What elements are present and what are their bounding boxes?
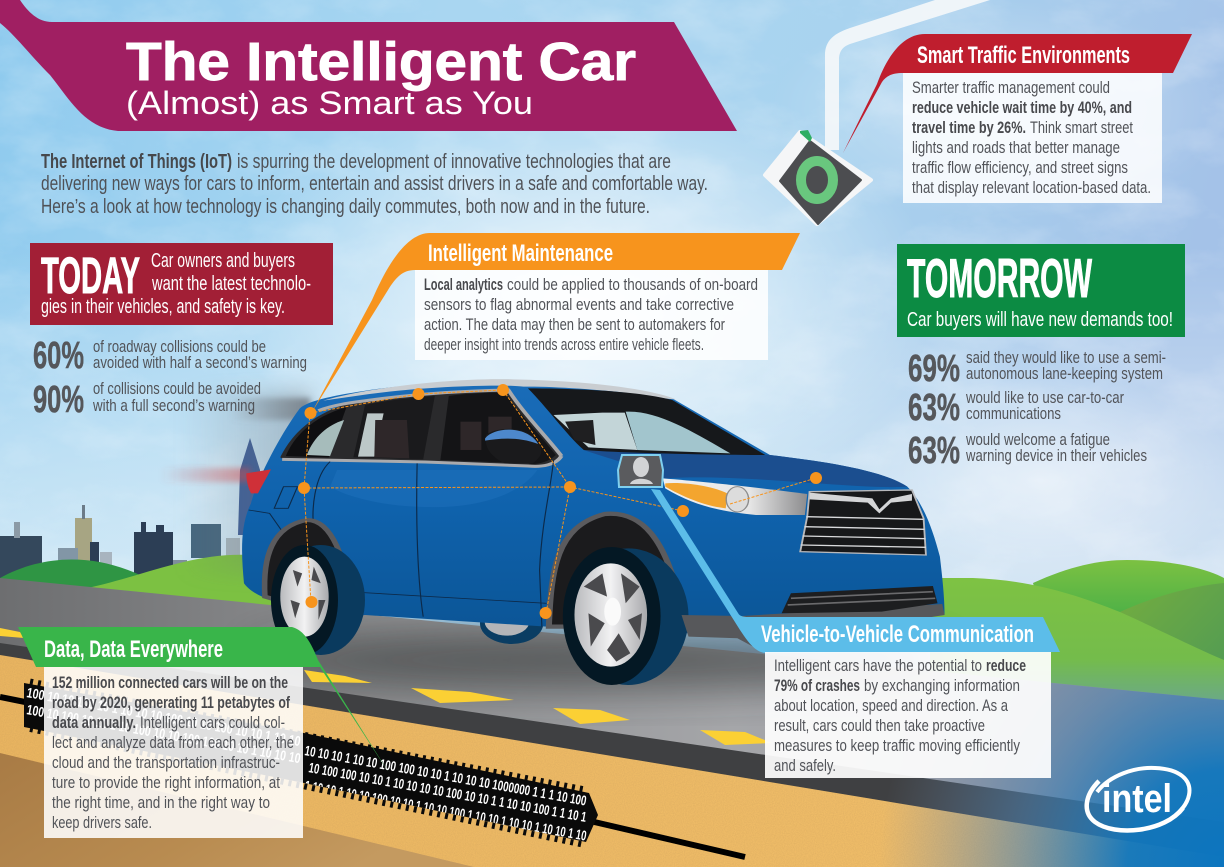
today description: want the latest technolo- bbox=[151, 273, 311, 295]
body text: keep drivers safe. bbox=[52, 813, 152, 832]
tail light bbox=[246, 469, 271, 493]
rear wheel bbox=[271, 545, 365, 655]
body text: action. The data may then be sent to automakers for bbox=[424, 315, 725, 334]
stat 63% car-to-car: would like to use car-to-car bbox=[965, 388, 1124, 407]
body text: and safely. bbox=[774, 756, 836, 775]
binary data cable: 1 10 10 1 10 10 100 10 10 1 10 10 100 1 10 10 1 10 10 1 10 10 1 10 bbox=[303, 777, 588, 844]
body text: road by 2020, generating 11 petabytes of bbox=[52, 693, 290, 712]
front wheel bbox=[563, 547, 689, 685]
far rear wheel bbox=[480, 603, 543, 644]
body text: ture to provide the right information, at bbox=[52, 773, 280, 792]
rear quarter window bbox=[286, 407, 346, 457]
heading: Intelligent Maintenance bbox=[428, 240, 613, 267]
body text: Smarter traffic management could bbox=[912, 78, 1110, 97]
headlight bbox=[663, 478, 807, 515]
red banner with pointer bbox=[843, 34, 1192, 153]
body highlight bbox=[330, 470, 537, 507]
body text: travel time by 26%. bbox=[912, 118, 1026, 137]
main title: The Intelligent Car bbox=[126, 32, 636, 92]
today statistics bbox=[33, 335, 307, 421]
body text: Local analytics bbox=[424, 275, 503, 294]
driver assist screen icon bbox=[618, 455, 663, 487]
light housing bbox=[765, 132, 871, 224]
body text: by exchanging information bbox=[864, 676, 1020, 695]
smart traffic environments panel bbox=[843, 34, 1192, 203]
green ring bbox=[801, 161, 833, 199]
intro text: delivering new ways for cars to inform, entertain and assist drivers in a safe and comfortable way. bbox=[41, 172, 708, 195]
intro text: is spurring the development of innovative technologies that are bbox=[237, 150, 671, 173]
body text bbox=[774, 656, 1026, 775]
intelligent maintenance panel bbox=[312, 233, 800, 412]
body text: Intelligent cars have the potential to bbox=[774, 656, 982, 675]
body text: deeper insight into trends across entire vehicle fleets. bbox=[424, 335, 704, 354]
body text bbox=[424, 275, 758, 354]
body text: lect and analyze data from each other, the bbox=[52, 733, 294, 752]
binary data cable: 100 10 10 100 10 1 10 10 10 100 10 10 100 10 10 1 10 10 bbox=[25, 684, 302, 749]
city skyline bbox=[0, 438, 260, 578]
green banner with pointer bbox=[18, 627, 389, 773]
body text: could be applied to thousands of on-board bbox=[507, 275, 758, 294]
road and ground bbox=[0, 578, 1224, 867]
stat 63% fatigue: 63% bbox=[908, 430, 960, 472]
binary data cable bbox=[0, 682, 745, 857]
side window frame bbox=[280, 390, 561, 466]
roof rail bbox=[323, 379, 676, 401]
tomorrow statistics bbox=[908, 348, 1166, 472]
front door window bbox=[440, 393, 556, 464]
intro text: Here’s a look at how technology is changing daily commutes, both now and in the future. bbox=[41, 195, 650, 218]
body card bbox=[415, 270, 768, 360]
stat 60%: of roadway collisions could be bbox=[93, 337, 266, 356]
blue banner with pointer bbox=[651, 489, 1060, 653]
front grille bbox=[800, 490, 926, 555]
intel logo: intel bbox=[1102, 777, 1172, 821]
right green hills bbox=[930, 560, 1224, 702]
stat 90%: of collisions could be avoided bbox=[93, 379, 261, 398]
today description: gies in their vehicles, and safety is key. bbox=[41, 296, 285, 318]
intro text: The Internet of Things (IoT) bbox=[41, 150, 232, 173]
data data everywhere panel bbox=[18, 627, 389, 838]
body text: Think smart street bbox=[1030, 118, 1133, 137]
body text: about location, speed and direction. As a bbox=[774, 696, 1008, 715]
orange banner with pointer bbox=[312, 233, 800, 412]
body text: lights and roads that better manage bbox=[912, 138, 1120, 157]
today panel bbox=[30, 243, 333, 325]
body text: cloud and the transportation infrastruc- bbox=[52, 753, 280, 772]
stat 63% fatigue bbox=[908, 430, 1147, 472]
intro text bbox=[41, 150, 708, 218]
sensor nodes bbox=[298, 384, 822, 619]
body text: data annually. bbox=[52, 713, 136, 732]
door and body lines bbox=[249, 460, 554, 627]
stat 69%: said they would like to use a semi- bbox=[966, 348, 1166, 367]
tomorrow panel bbox=[897, 244, 1185, 337]
today description bbox=[41, 250, 311, 318]
body card bbox=[765, 652, 1051, 778]
binary data cable: 10 100 100 10 10 1 10 10 10 10 100 10 10 1 1 10 10 100 1 1 10 1 bbox=[307, 759, 588, 825]
vehicle-to-vehicle panel bbox=[651, 489, 1060, 778]
green box bbox=[897, 244, 1185, 337]
car body bbox=[242, 383, 945, 633]
stat 69% bbox=[908, 348, 1166, 390]
chrome window trim bbox=[282, 390, 561, 466]
body text bbox=[912, 78, 1151, 197]
motion blur behind car bbox=[160, 390, 310, 575]
title ribbon bbox=[0, 0, 737, 131]
stat 90%: 90% bbox=[33, 379, 84, 421]
hood bbox=[584, 450, 907, 487]
stat 60%: 60% bbox=[33, 335, 84, 377]
stat 90%: with a full second’s warning bbox=[92, 396, 255, 415]
left green hills bbox=[0, 555, 300, 610]
body text: reduce vehicle wait time by 40%, and bbox=[912, 98, 1132, 117]
stat 63% fatigue: warning device in their vehicles bbox=[965, 446, 1147, 465]
stat 63% fatigue: would welcome a fatigue bbox=[965, 430, 1110, 449]
stat 63% car-to-car: communications bbox=[966, 404, 1061, 423]
stat 90% bbox=[33, 379, 261, 421]
rear wheel arch bbox=[265, 520, 357, 615]
heading: Smart Traffic Environments bbox=[917, 42, 1130, 69]
TODAY heading: TODAY bbox=[41, 247, 140, 304]
body card bbox=[44, 667, 303, 838]
body text: the right time, and in the right way to bbox=[52, 793, 270, 812]
heading: Data, Data Everywhere bbox=[44, 636, 223, 663]
binary data cable: 10 10 10 1 10 10 100 100 10 10 1 10 10 10 1000000 1 1 1 10 100 bbox=[303, 742, 588, 809]
intel logo bbox=[1087, 768, 1189, 830]
body text: result, cars could then take proactive bbox=[774, 716, 985, 735]
stat 69%: 69% bbox=[908, 348, 960, 390]
today description: Car owners and buyers bbox=[151, 250, 295, 272]
smart traffic light bbox=[765, 0, 990, 224]
stat 60% bbox=[33, 335, 307, 377]
binary data cable: 100 10 100 10 10 1 10 100 10 10 100 100 10 10 1 10 10 10 bbox=[25, 701, 302, 766]
red box bbox=[30, 243, 333, 325]
front bumper bbox=[682, 586, 945, 653]
IoT sensor network on car bbox=[298, 384, 822, 619]
side mirror bbox=[485, 429, 541, 463]
stat 60%: avoided with half a second’s warning bbox=[93, 353, 307, 372]
body text: 152 million connected cars will be on the bbox=[52, 673, 288, 692]
stat 63% car-to-car bbox=[908, 387, 1124, 429]
body text bbox=[52, 673, 294, 832]
body text: 79% of crashes bbox=[774, 676, 860, 695]
body text: that display relevant location-based data. bbox=[912, 178, 1151, 197]
body text: measures to keep traffic moving efficiently bbox=[774, 736, 1020, 755]
sensor links bbox=[304, 390, 816, 613]
car illustration bbox=[242, 379, 945, 685]
subtitle: (Almost) as Smart as You bbox=[126, 85, 533, 121]
green indicator corner bbox=[800, 130, 812, 142]
body text: reduce bbox=[986, 656, 1026, 675]
windscreen bbox=[528, 388, 765, 455]
light pole bbox=[825, 0, 990, 150]
body text: sensors to flag abnormal events and take corrective bbox=[424, 295, 734, 314]
rear door window bbox=[353, 396, 435, 459]
ribbon shape bbox=[0, 0, 737, 131]
light face bbox=[780, 141, 861, 224]
body text: traffic flow efficiency, and street signs bbox=[912, 158, 1128, 177]
body card bbox=[903, 73, 1162, 203]
stat 63% car-to-car: 63% bbox=[908, 387, 960, 429]
front wheel arch bbox=[549, 514, 685, 627]
heading: Vehicle-to-Vehicle Communication bbox=[761, 621, 1034, 648]
body text: Intelligent cars could col- bbox=[140, 713, 285, 732]
stat 69%: autonomous lane-keeping system bbox=[966, 364, 1163, 383]
